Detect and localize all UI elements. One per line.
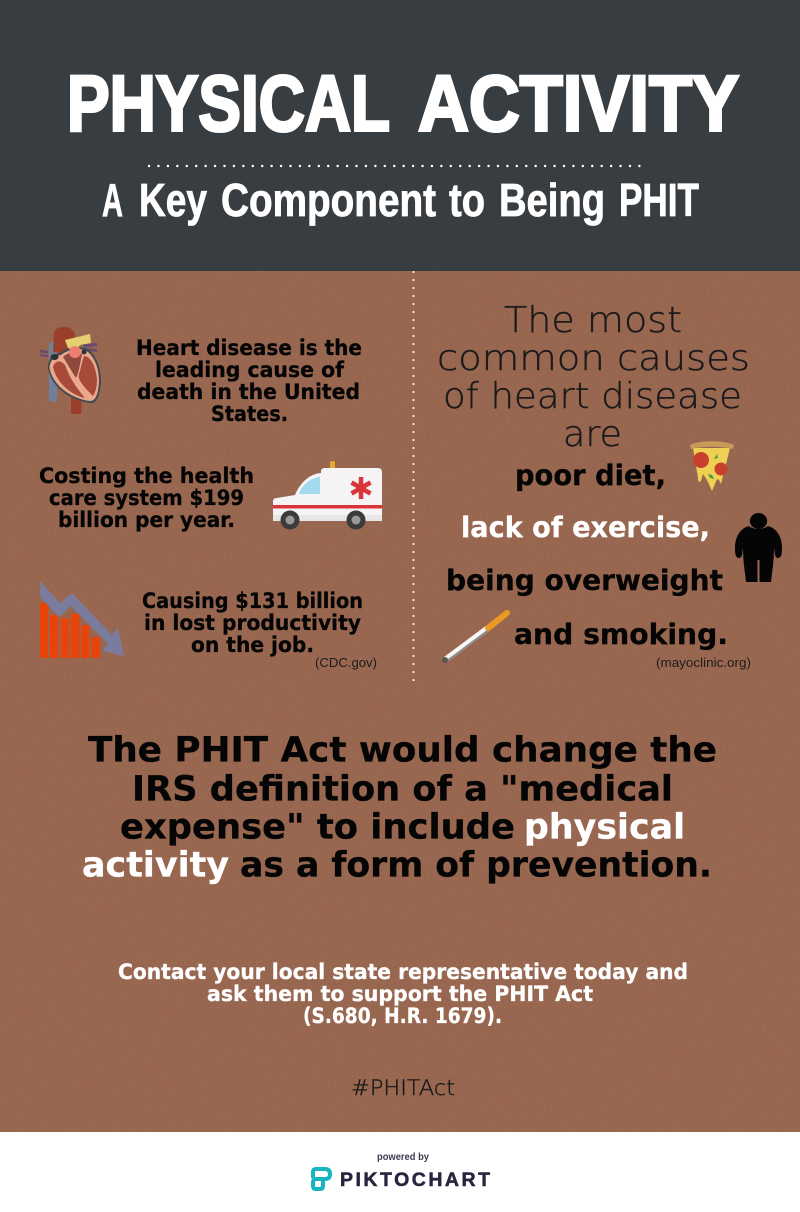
dotted divider bbox=[149, 165, 646, 167]
text: heart disease: States. bbox=[211, 402, 288, 426]
subtitle bbox=[102, 174, 699, 226]
icon: Piktochart logo bbox=[313, 1169, 330, 1189]
text block: call to action: Contact your local state representative today and bbox=[118, 960, 688, 984]
subtitle: to bbox=[449, 174, 485, 226]
text block: call to action bbox=[118, 960, 688, 1028]
source: Mayo Clinic: (mayoclinic.org) bbox=[656, 655, 751, 670]
cause: poor diet: poor diet, bbox=[515, 459, 666, 492]
text block: PHIT Act statement: activity bbox=[82, 846, 229, 886]
text: lost productivity: on the job. bbox=[191, 633, 314, 657]
text: lost productivity: Causing $131 billion bbox=[142, 589, 363, 613]
text: health care cost bbox=[39, 464, 254, 532]
text: health care cost: Costing the health bbox=[39, 464, 254, 488]
text: heart disease bbox=[136, 336, 362, 426]
text: heart disease: leading cause of bbox=[155, 358, 345, 382]
text block: PHIT Act statement: expense" to include bbox=[120, 808, 515, 848]
text block: PHIT Act statement: physical bbox=[524, 808, 685, 848]
panel: header bbox=[0, 0, 800, 271]
source: CDC: (CDC.gov) bbox=[315, 655, 377, 670]
powered by: powered by bbox=[377, 1151, 429, 1163]
heading: common causes bbox=[437, 300, 750, 455]
subtitle: PHIT bbox=[619, 174, 699, 226]
hashtag: #PHITAct bbox=[351, 1076, 455, 1100]
title: ACTIVITY bbox=[418, 58, 739, 148]
panel: brown background bbox=[0, 271, 800, 1132]
icon: pizza slice bbox=[690, 441, 734, 491]
icon: anatomical heart bbox=[40, 327, 101, 414]
wordmark: PIKTOCHART bbox=[340, 1169, 490, 1191]
text: health care cost: billion per year. bbox=[58, 508, 235, 532]
icon: overweight person bbox=[735, 513, 782, 582]
subtitle: Key bbox=[139, 174, 207, 226]
title bbox=[67, 58, 739, 148]
text: lost productivity bbox=[142, 589, 363, 657]
text block: PHIT Act statement: The PHIT Act would change the bbox=[88, 730, 717, 770]
text block: call to action: (S.680, H.R. 1679). bbox=[303, 1004, 502, 1028]
text: heart disease: Heart disease is the bbox=[136, 336, 362, 360]
text: health care cost: care system $199 bbox=[49, 486, 244, 510]
cause: being overweight: being overweight bbox=[446, 564, 723, 597]
text block: PHIT Act statement: IRS definition of a "medical bbox=[132, 770, 673, 810]
title: PHYSICAL bbox=[67, 58, 390, 148]
subtitle: Being bbox=[499, 174, 605, 226]
text block: call to action: ask them to support the PHIT Act bbox=[207, 982, 593, 1006]
heading: common causes: The most bbox=[504, 300, 682, 341]
text: heart disease: death in the United bbox=[137, 380, 360, 404]
icon: cigarette bbox=[442, 613, 507, 663]
icon: declining bar chart bbox=[40, 581, 124, 658]
vertical dotted divider bbox=[412, 272, 414, 685]
subtitle: A bbox=[102, 174, 123, 226]
heading: common causes: of heart disease bbox=[443, 376, 742, 417]
text block: PHIT Act statement bbox=[82, 730, 717, 886]
subtitle: Component bbox=[221, 174, 436, 226]
heading: common causes: are bbox=[563, 414, 622, 455]
cause: smoking: and smoking. bbox=[514, 618, 728, 651]
cause: lack of exercise: lack of exercise, bbox=[461, 511, 710, 544]
text: lost productivity: in lost productivity bbox=[144, 611, 361, 635]
icon: ambulance bbox=[273, 461, 382, 530]
text block: PHIT Act statement: as a form of prevention. bbox=[240, 846, 712, 886]
heading: common causes: common causes bbox=[437, 338, 750, 379]
panel: footer bbox=[0, 1132, 800, 1212]
